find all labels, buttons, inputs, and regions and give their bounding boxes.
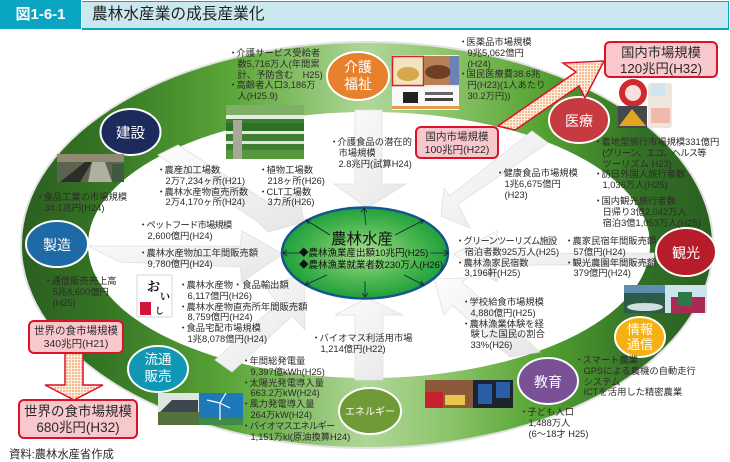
text: exports and direct sales: 食品宅配市場規模 [186,323,261,333]
text: energy: 1,151万kl(原油換算H24) [250,432,350,442]
text: children: 1,488万人 [528,418,570,428]
figure number: 図1-6-1 [15,6,66,23]
text: health food: 健康食品市場規模 [504,168,578,178]
badge: information and communication [615,317,665,357]
centre figures [299,248,443,270]
text: school meals: 学校給食市場規模 [470,297,544,307]
text: domestic tourism: 日帰り3億2,042万人 [602,207,687,217]
text: exports and direct sales: 6,117億円(H26) [188,291,252,301]
text: food industry: 34.1兆円(H24) [44,203,104,213]
text: green tourism: ・ [456,236,465,246]
text: processing: ・ [156,165,166,175]
arrow: construction [158,145,304,232]
photo: solar and wind power [158,393,243,425]
text: mail order [44,276,117,308]
text: green tourism: 農林漁家民宿数 [464,258,529,268]
title [82,1,729,30]
badge: care and welfare: 福祉 [344,76,372,92]
text: school meals [462,297,545,350]
header band [0,0,729,30]
text: mail order: 5兆8,600億円 [52,287,109,297]
arrow: distribution [215,273,305,372]
text: health food: (H23) [504,190,528,200]
text: school meals: 4,880億円(H25) [470,308,536,318]
text: biomass market: 1,214億円(H22) [320,344,386,354]
text: plant factories: ・ [258,165,268,175]
text: pet food: ・ [138,220,148,230]
text: biomass market: ・ [312,333,321,343]
text: care: 計、予防含む H25) [238,70,323,80]
photo: export logo poster: し [155,304,164,317]
text: processed products [138,248,258,269]
text: care: 介護サービス受給者 [236,48,320,58]
text: care food: 介護食品の潜在的 [338,137,412,147]
text: health food [496,168,578,200]
text: energy: ・ [242,378,251,388]
text: plant factories: 218ヶ所(H26) [268,176,325,186]
text: care: ・ [228,48,238,58]
badge: care and welfare [327,52,389,100]
text: energy: 年間総発電量 [250,356,305,366]
text: smart agriculture: ・ [574,355,584,365]
text: energy: ・ [242,356,251,366]
text: health food: ・ [496,168,505,178]
text: processing: 2万7,234ヶ所(H21) [166,176,245,186]
text: processed products: 9,780億円(H24) [148,259,213,269]
text: medical [458,37,546,101]
callout: domestic market 100 trillion [415,126,499,159]
text: inbound tourism: 着地型旅行市場規模331億円 [602,137,719,147]
arrow: education [434,278,540,357]
text: medical: 医薬品市場規模 [466,37,532,47]
centre figures: ◆農林漁業産出額10兆円(H25) [299,248,428,259]
arrow: medical [441,131,548,228]
text: exports and direct sales: ・ [178,302,188,312]
text: school meals: ・ [462,319,471,329]
text: inbound tourism: 訪日外国人旅行者数 [602,169,685,179]
callout: domestic market 120 trillion: 国内市場規模 [621,44,701,60]
source note: 資料:農林水産省作成 [9,449,114,461]
text: energy: バイオマスエネルギー [250,421,334,431]
text: inbound tourism: ・ [594,137,603,147]
text: biomass market [312,333,412,354]
text: farm stays [564,236,656,278]
badge: distribution and sales: 販売 [144,369,172,384]
text: domestic tourism: 国内観光旅行者数 [602,196,676,206]
text: inbound tourism: ・ [594,169,603,179]
centre ellipse [282,208,448,298]
badge: education: 教育 [534,374,562,390]
text: processed products: 農林水産物加工年間販売額 [146,248,258,258]
text: processing: ・ [156,187,166,197]
photo: tourism landscapes [624,285,707,313]
photo: food factory [57,154,124,182]
text: energy: 9,397億kWh(H25) [250,367,325,377]
photo: health food products [618,79,672,128]
badge: energy [339,388,401,434]
callout: world market 340 trillion: 340兆円(H21) [44,338,108,350]
text: green tourism [456,236,559,278]
text: exports and direct sales [178,280,308,344]
text: energy: 風力発電導入量 [250,399,315,409]
badge: distribution and sales: 流通 [144,352,172,367]
title: 農林水産業の成長産業化 [92,6,265,23]
badge: information and communication: 通信 [627,337,653,352]
figure number [0,0,81,29]
text: exports and direct sales: 1兆8,078億円(H24) [188,334,267,344]
centre figures: ◆農林漁業就業者数230万人(H26) [299,260,443,270]
text: domestic tourism: ・ [594,196,603,206]
text: energy [242,356,350,442]
arrow: manufacturing [88,231,283,282]
photo: plant factory [226,105,304,159]
red arrow: world market growth [45,353,103,400]
text: food industry: ・ [36,192,45,202]
text: medical: ・ [458,37,468,47]
text: plant factories [258,165,325,207]
callout: domestic market 100 trillion: 国内市場規模 [426,130,488,142]
text: care: 数5,716万人(年間累 [238,59,320,69]
text: plant factories: 3カ所(H26) [268,197,315,207]
text: exports and direct sales: 農林水産物直売所年間販売額 [186,302,307,312]
text: green tourism: 3,196軒(H25) [464,268,520,278]
text: farm stays: 379億円(H24) [574,268,631,278]
badge: manufacturing [26,221,88,267]
callout: world market 680 trillion [18,399,138,439]
text: energy: ・ [242,421,251,431]
arrow: energy [335,298,403,380]
text: inbound tourism: 1,036万人(H25) [602,180,668,190]
badge: energy: エネルギー [345,406,395,418]
badge: medical [549,97,609,143]
text: green tourism: 宿泊者数925万人(H25) [464,247,559,257]
text: school meals: 農林漁業体験を経 [470,319,544,329]
text: school meals: ・ [462,297,471,307]
text: care food: ・ [330,137,339,147]
text: care: ・ [228,80,238,90]
text: energy: 太陽光発電導入量 [250,378,324,388]
text: school meals: 験した国民の割合 [470,329,545,339]
text: exports and direct sales: 8,759億円(H24) [188,312,253,322]
text: mail order: (H25) [52,298,76,308]
text: medical: 円(H23)(1人あたり [468,80,546,90]
text: care [228,48,323,101]
centre heading: 農林水産 [331,231,393,248]
badge: tourism [656,228,716,276]
text: care: 人(H25.9) [238,91,278,101]
text: farm stays: ・ [564,258,574,268]
arrow: care [334,110,406,208]
badge: education [518,358,578,404]
callout: world market 680 trillion: 世界の食市場規模 [24,404,132,418]
photo: export logo poster [137,275,172,317]
text: farm stays: 57億円(H24) [574,247,626,257]
photo: food education [425,380,513,408]
text: mail order: 通信販売売上高 [52,276,117,286]
text: processing: 農林水産物直売所数 [164,187,248,197]
text: farm stays: ・ [564,236,574,246]
callout: domestic market 100 trillion: 100兆円(H22) [425,144,489,156]
text: medical: ・ [458,69,468,79]
text: medical: 国民医療費38.6兆 [466,69,540,79]
callout: domestic market 120 trillion: 120兆円(H32) [620,60,702,76]
text: plant factories: 植物工場数 [266,165,313,175]
badge: medical: 医療 [565,113,593,129]
text: green tourism: グリーンツーリズム施設 [464,236,557,246]
text: health food: 1兆6,675億円 [504,179,561,189]
text: plant factories: CLT工場数 [266,187,311,197]
badge: distribution and sales [128,346,188,392]
badge: care and welfare: 介護 [344,59,372,75]
arrows pointing to the centre [88,110,654,380]
text: children: 子ども人口 [528,407,574,417]
text: school meals: 33%(H26) [470,340,512,350]
text: inbound tourism: (グリーン、エコ、ヘルス等 [602,148,706,158]
text: pet food: 2,600億円(H24) [148,231,213,241]
text: smart agriculture: ICTを活用した精密農業 [584,387,682,397]
text: pet food: ペットフード市場規模 [146,220,231,230]
text: children [520,407,588,439]
text: care food [330,137,412,169]
red arrow: domestic market growth [498,61,604,130]
callout: world market 680 trillion: 680兆円(H32) [36,420,120,434]
text: care food: 市場規模 [338,148,376,158]
text: farm stays: 農家民宿年間販売額 [572,236,656,246]
arrow: tourism [453,231,654,282]
text: children: (6〜18才 H25) [528,429,588,439]
text: pet food [138,220,232,241]
text: smart agriculture: システム [584,377,620,387]
text: inbound tourism [594,137,719,190]
text: domestic tourism: 宿泊3億1,053万人(H25) [602,218,701,228]
badge: construction [100,109,160,155]
text: exports and direct sales: 農林水産物・食品輸出額 [186,280,289,290]
text: energy: ・ [242,399,251,409]
text: domestic tourism [594,196,701,228]
text: processing: 農産加工場数 [164,165,220,175]
badge: information and communication: 情報 [627,322,653,337]
text: smart agriculture [574,355,696,397]
text: exports and direct sales: ・ [178,323,188,333]
text: food industry [36,192,127,213]
text: medical: 9兆5,062億円 [468,48,524,58]
photo: export logo poster: お [147,276,160,295]
text: mail order: ・ [44,276,53,286]
text: plant factories: ・ [258,187,268,197]
text: energy: 663.2万kW(H24) [250,388,320,398]
photo: export logo poster: い [160,288,170,303]
text: exports and direct sales: ・ [178,280,188,290]
text: smart agriculture: GPSによる農機の自動走行 [584,366,696,376]
text: green tourism: ・ [456,258,465,268]
text: farm stays: 観光農園年間販売額 [572,258,656,268]
badge: tourism: 観光 [672,245,700,261]
text: biomass market: バイオマス利活用市場 [320,333,412,343]
callout: domestic market 120 trillion [604,41,718,78]
text: processed products: ・ [138,248,148,258]
badge: construction: 建設 [116,125,145,142]
text: smart agriculture: スマート農業 [582,355,638,365]
text: care food: 2.8兆円(試算H24) [338,159,412,169]
text: medical: (H24) [468,59,491,69]
text: processing: 2万4,170ヶ所(H24) [166,197,245,207]
callout: world market 340 trillion [28,320,124,354]
text: food industry: 食品工業の市場規模 [44,192,127,202]
badge: manufacturing: 製造 [43,237,71,253]
text: energy: 264万kW(H24) [250,410,312,420]
photo: care food products [392,55,459,110]
callout: world market 340 trillion: 世界の食市場規模 [34,325,118,337]
text: children: ・ [520,407,529,417]
text: medical: 30.2万円)) [468,91,510,101]
text: processing [156,165,248,207]
text: inbound tourism: ツーリズム H23) [602,159,672,169]
text: care: 高齢者人口3,186万 [236,80,316,90]
